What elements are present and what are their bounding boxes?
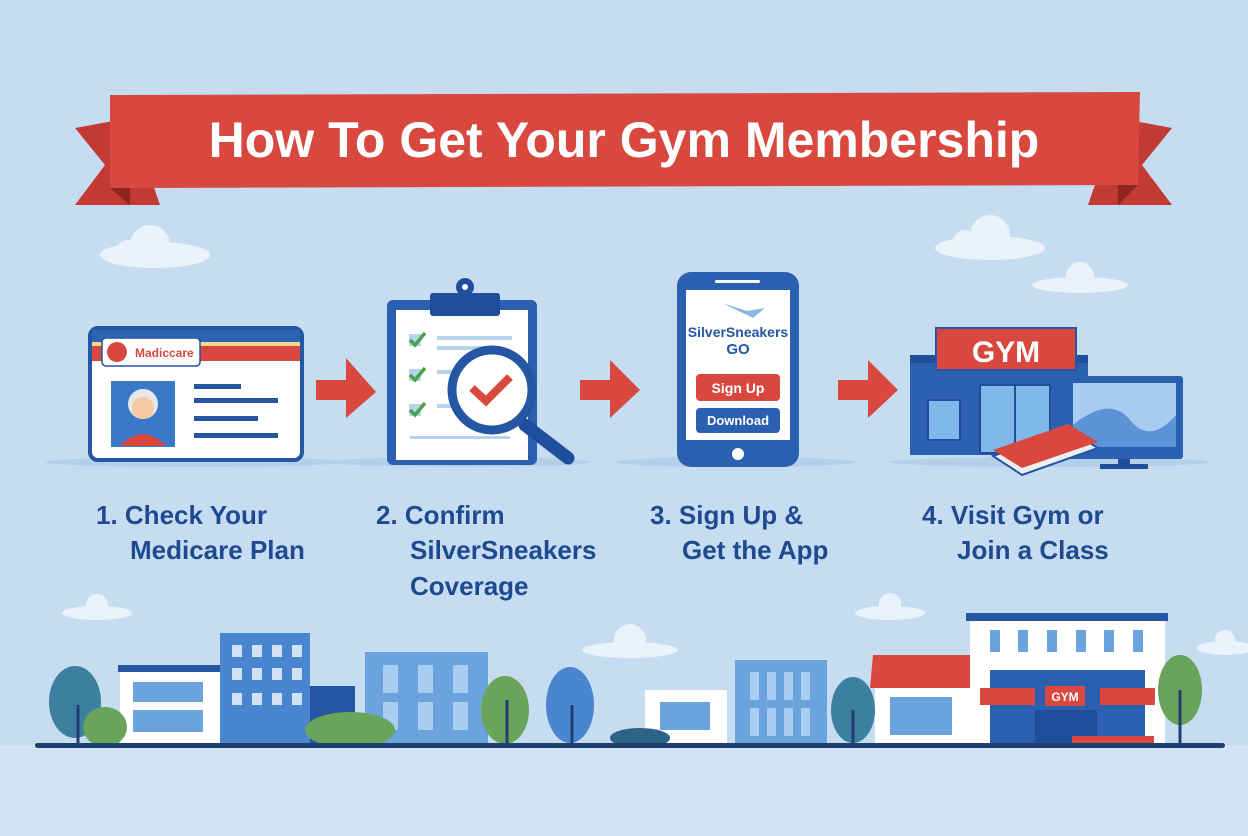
icon: gym building	[910, 328, 1183, 475]
step 1 label: Medicare Plan	[130, 535, 305, 565]
icon: phone app	[677, 272, 799, 467]
step 3 label: Get the App	[682, 535, 828, 565]
icon: phone app: GO	[726, 341, 750, 358]
city skyline	[35, 613, 1225, 748]
step 1 label: 1. Check Your	[96, 500, 267, 530]
step 4 label: Join a Class	[957, 535, 1109, 565]
step 3 label	[650, 500, 828, 565]
step 1 label	[96, 500, 305, 565]
city skyline: GYM	[1051, 690, 1079, 704]
step 2 label: Coverage	[410, 571, 528, 601]
step 2 label	[376, 500, 596, 601]
step 4 label	[922, 500, 1109, 565]
icon: clipboard with magnifier	[387, 278, 568, 465]
icon: phone app: Download	[707, 413, 769, 428]
title: How To Get Your Gym Membership	[209, 112, 1039, 168]
arrow 2	[580, 360, 640, 418]
icon: medicare card	[90, 328, 302, 460]
clouds	[62, 215, 1248, 658]
step 3 label: 3. Sign Up &	[650, 500, 803, 530]
icon: gym building: GYM	[972, 336, 1040, 369]
arrow 3	[838, 360, 898, 418]
arrow 1	[316, 358, 376, 418]
step 4 label: 4. Visit Gym or	[922, 500, 1104, 530]
step 2 label: 2. Confirm	[376, 500, 505, 530]
step 2 label: SilverSneakers	[410, 535, 596, 565]
icon: phone app: Sign Up	[712, 380, 764, 396]
title banner	[75, 92, 1172, 205]
icon: phone app: SilverSneakers	[688, 324, 788, 340]
ground shadows	[45, 457, 1210, 467]
icon: medicare card: Madiccare	[135, 346, 194, 360]
